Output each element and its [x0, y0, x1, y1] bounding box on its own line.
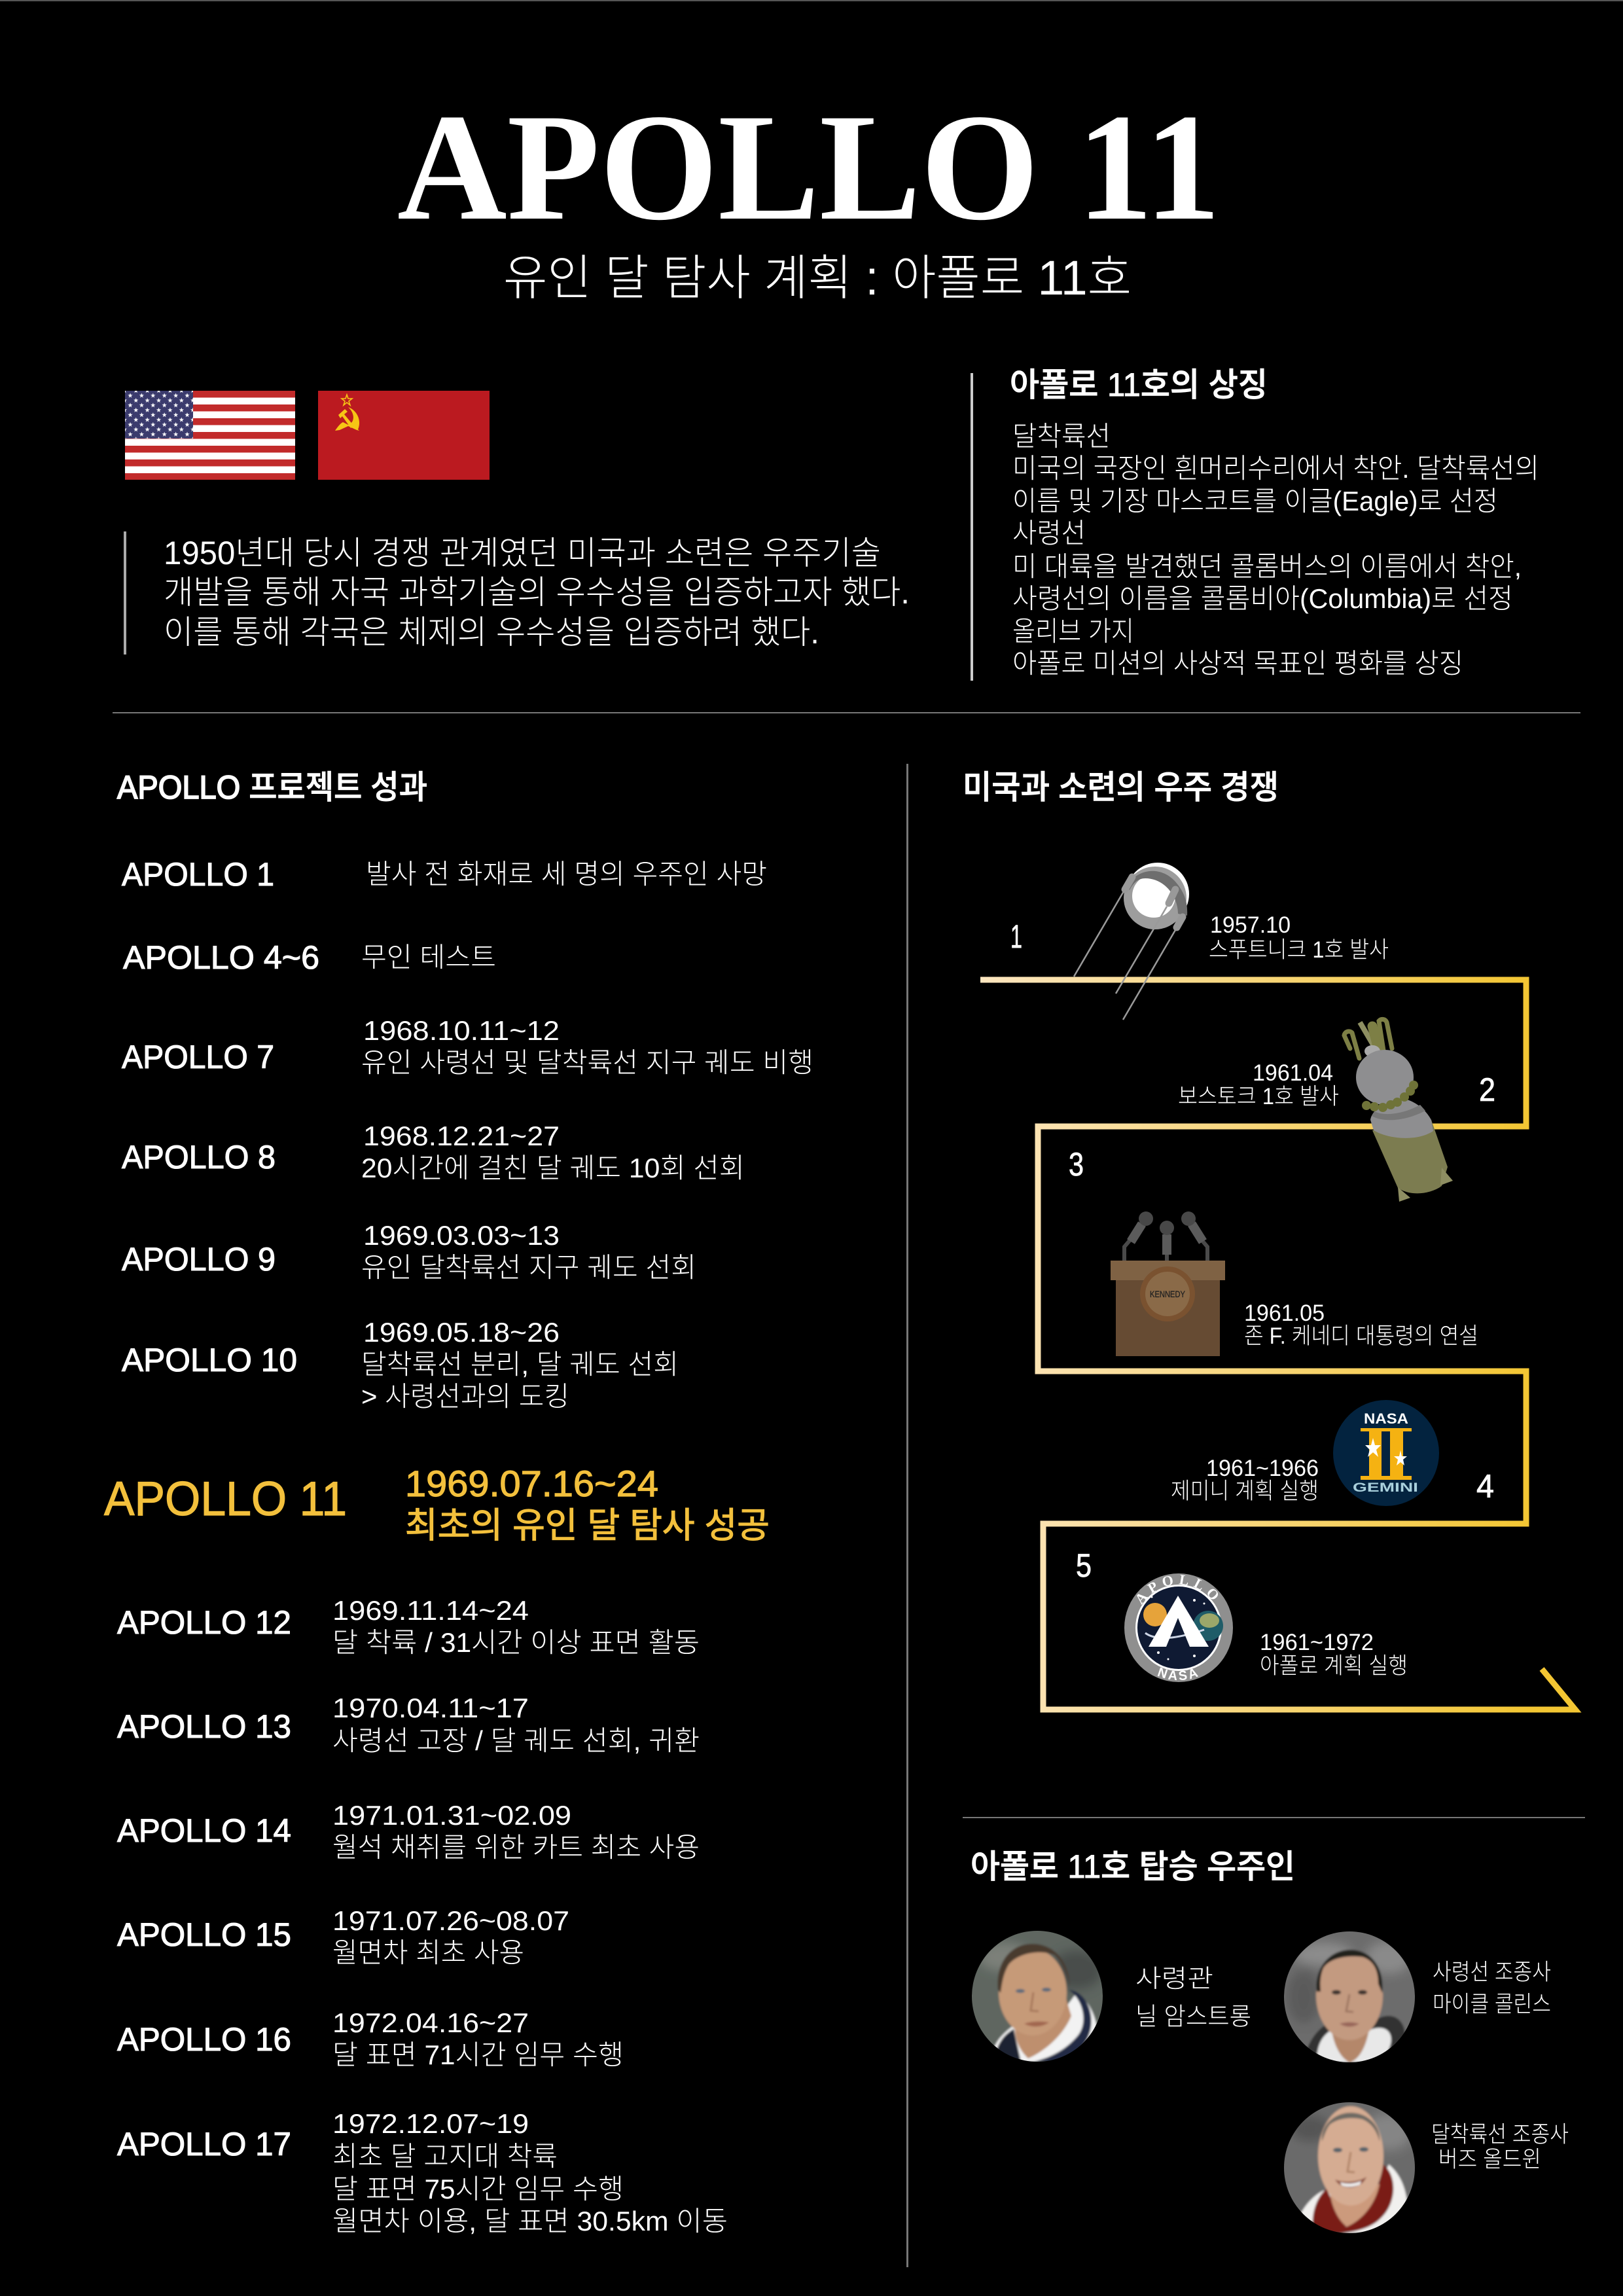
icon: Sputnik	[1074, 863, 1189, 1020]
text block: symbols description: 미 대륙을 발견했던 콜롬버스의 이름에서 착안,	[1012, 551, 1522, 582]
row: Apollo 9: APOLLO 9	[122, 1241, 276, 1278]
text block: symbols description: 사령선	[1012, 518, 1086, 548]
icon: Gemini patch: GEMINI	[1353, 1481, 1418, 1495]
row: Apollo 14	[117, 1800, 700, 1863]
icon: Apollo patch: APOLLO	[1137, 1575, 1218, 1605]
label: step 2: 1961.04	[1253, 1060, 1333, 1086]
label: step 2: 보스토크 1호 발사	[1178, 1084, 1339, 1109]
row: Apollo 12: 1969.11.14~24	[332, 1595, 529, 1626]
label: step 2	[1178, 1060, 1495, 1109]
row: Apollo 10: 달착륙선 분리, 달 궤도 선회	[361, 1349, 679, 1380]
row: Apollo 15: APOLLO 15	[117, 1916, 291, 1953]
row: Apollo 17: 1972.12.07~19	[332, 2108, 529, 2139]
label: step 3: 1961.05	[1244, 1300, 1325, 1326]
text block: symbols description: 미국의 국장인 흰머리수리에서 착안. 달착륙선의	[1012, 453, 1539, 484]
row: Apollo 7	[122, 1015, 813, 1078]
label: step 5: 1961~1972	[1260, 1630, 1374, 1655]
label: step 2: 2	[1479, 1071, 1495, 1108]
row: Apollo 4-6: APOLLO 4~6	[123, 939, 319, 976]
row: Apollo 1: 발사 전 화재로 세 명의 우주인 사망	[366, 859, 767, 889]
label: commander	[1135, 1965, 1251, 2031]
row: Apollo 17: 달 표면 75시간 임무 수행	[332, 2174, 624, 2204]
label: step 4: 1961~1966	[1206, 1456, 1319, 1481]
panel: Apollo project results	[104, 769, 813, 2236]
heading: space race: 미국과 소련의 우주 경쟁	[963, 769, 1279, 806]
portrait: Neil Armstrong	[969, 1928, 1106, 2065]
row: Apollo 12	[117, 1595, 700, 1658]
title: APOLLO 11	[397, 82, 1221, 252]
subtitle: 유인 달 탐사 계획 : 아폴로 11호	[503, 251, 1132, 305]
heading: symbols: 아폴로 11호의 상징	[1010, 367, 1268, 403]
row: Apollo 10: APOLLO 10	[122, 1342, 297, 1378]
row: Apollo 16: 1972.04.16~27	[332, 2007, 529, 2038]
text block: symbols description: 올리브 가지	[1012, 616, 1134, 647]
row: Apollo 15: 1971.07.26~08.07	[332, 1905, 569, 1936]
label: step 4: 4	[1476, 1468, 1494, 1505]
icon: Apollo patch: NASA	[1157, 1668, 1198, 1681]
label: commander: 닐 암스트롱	[1135, 2003, 1251, 2031]
icon: Soviet flag	[318, 391, 490, 480]
row: Apollo 11 highlight: 1969.07.16~24	[405, 1463, 658, 1504]
panel: symbols of Apollo 11	[971, 367, 1539, 681]
panel: US-USSR space race timeline	[963, 769, 1581, 1712]
label: commander: 사령관	[1135, 1965, 1213, 1993]
label: command module pilot: 사령선 조종사	[1433, 1960, 1551, 1985]
label: lunar module pilot	[1431, 2122, 1569, 2172]
heading: project results: APOLLO 프로젝트 성과	[117, 769, 427, 806]
portrait: Buzz Aldrin	[1281, 2099, 1418, 2236]
row: Apollo 4-6	[123, 939, 496, 976]
row: Apollo 14: APOLLO 14	[117, 1812, 291, 1849]
row: Apollo 16: 달 표면 71시간 임무 수행	[332, 2039, 624, 2070]
icon: Gemini patch: NASA	[1364, 1410, 1408, 1427]
row: Apollo 7: 유인 사령선 및 달착륙선 지구 궤도 비행	[361, 1047, 813, 1078]
row: Apollo 17: 최초 달 고지대 착륙	[332, 2141, 558, 2172]
icon: Kennedy podium: KENNEDY	[1150, 1289, 1186, 1299]
row: Apollo 13	[117, 1693, 700, 1756]
row: Apollo 13: 사령선 고장 / 달 궤도 선회, 귀환	[332, 1725, 700, 1756]
label: step 3: 3	[1069, 1146, 1084, 1183]
row: Apollo 10: 1969.05.18~26	[363, 1317, 560, 1348]
row: Apollo 8: 1968.12.21~27	[363, 1121, 560, 1151]
row: Apollo 1: APOLLO 1	[122, 856, 274, 893]
row: Apollo 17: APOLLO 17	[117, 2126, 291, 2162]
icon: Kennedy podium	[1111, 1211, 1225, 1356]
icon: Gemini patch	[1333, 1400, 1439, 1506]
row: Apollo 8: APOLLO 8	[122, 1139, 276, 1175]
text block: symbols description: 이름 및 기장 마스코트를 이글(Eagle)로 선정	[1012, 486, 1498, 516]
row: Apollo 9	[122, 1220, 696, 1283]
row: Apollo 11 highlight: 최초의 유인 달 탐사 성공	[405, 1506, 770, 1545]
row: Apollo 9: 유인 달착륙선 지구 궤도 선회	[361, 1252, 696, 1283]
icon: US flag	[125, 391, 295, 480]
row: Apollo 12: APOLLO 12	[117, 1604, 291, 1641]
row: Apollo 10	[122, 1317, 679, 1412]
row: Apollo 17	[117, 2108, 728, 2236]
icon: Vostok rocket	[1344, 1019, 1453, 1202]
arrow: timeline path	[980, 980, 1575, 1710]
text block: symbols description: 달착륙선	[1012, 421, 1111, 452]
heading: crew: 아폴로 11호 탑승 우주인	[971, 1848, 1295, 1885]
text block: symbols description: 사령선의 이름을 콜롬비아(Columbia)로 선정	[1012, 583, 1513, 614]
row: Apollo 10: > 사령선과의 도킹	[361, 1381, 569, 1412]
row: Apollo 1	[122, 856, 767, 893]
label: command module pilot: 마이클 콜린스	[1433, 1992, 1551, 2017]
icon: rocket antennae	[1344, 1019, 1392, 1060]
label: step 1: 1957.10	[1210, 912, 1291, 938]
row: Apollo 11 highlight	[104, 1463, 770, 1545]
row: Apollo 4-6: 무인 테스트	[361, 942, 496, 973]
row: Apollo 13: APOLLO 13	[117, 1708, 291, 1745]
row: Apollo 16	[117, 2007, 624, 2070]
text block: intro paragraph: 개발을 통해 자국 과학기술의 우수성을 입증하고자 했다.	[164, 574, 910, 611]
label: step 1: 1	[1010, 918, 1022, 955]
panel: Apollo 11 crew	[969, 1848, 1569, 2236]
label: step 3: 존 F. 케네디 대통령의 연설	[1244, 1323, 1478, 1349]
row: Apollo 9: 1969.03.03~13	[363, 1220, 560, 1251]
label: step 4	[1171, 1456, 1494, 1505]
text block: intro paragraph: 1950년대 당시 경쟁 관계였던 미국과 소련은 우주기술	[164, 535, 881, 571]
label: command module pilot	[1433, 1960, 1551, 2017]
portrait: Michael Collins	[1281, 1928, 1418, 2066]
label: step 1	[1010, 912, 1389, 963]
top edge line	[0, 0, 1623, 1]
icon: Apollo patch	[1124, 1573, 1233, 1682]
label: lunar module pilot: 버즈 올드윈	[1438, 2147, 1541, 2172]
label: step 5	[1076, 1547, 1408, 1679]
row: Apollo 13: 1970.04.11~17	[332, 1693, 529, 1723]
label: step 1: 스푸트니크 1호 발사	[1209, 937, 1389, 963]
label: step 5: 아폴로 계획 실행	[1260, 1653, 1408, 1679]
label: step 4: 제미니 계획 실행	[1171, 1479, 1319, 1504]
row: Apollo 8: 20시간에 걸친 달 궤도 10회 선회	[361, 1153, 745, 1183]
row: Apollo 16: APOLLO 16	[117, 2021, 291, 2058]
row: Apollo 11 highlight: APOLLO 11	[104, 1473, 347, 1526]
text block: symbols description: 아폴로 미션의 사상적 목표인 평화를 상징	[1012, 648, 1463, 679]
row: Apollo 15	[117, 1905, 569, 1968]
row: Apollo 7: 1968.10.11~12	[363, 1015, 560, 1046]
text block: intro paragraph	[124, 531, 910, 655]
label: step 3	[1069, 1146, 1478, 1349]
row: Apollo 12: 달 착륙 / 31시간 이상 표면 활동	[332, 1627, 700, 1658]
row: Apollo 7: APOLLO 7	[122, 1039, 274, 1075]
text block: intro paragraph: 이를 통해 각국은 체제의 우수성을 입증하려 했다.	[164, 614, 819, 651]
text block: symbols description	[1012, 421, 1539, 679]
row: Apollo 17: 월면차 이용, 달 표면 30.5km 이동	[332, 2206, 728, 2236]
row: Apollo 15: 월면차 최초 사용	[332, 1937, 524, 1968]
row: Apollo 14: 1971.01.31~02.09	[332, 1800, 571, 1831]
label: step 5: 5	[1076, 1547, 1092, 1584]
row: Apollo 8	[122, 1121, 745, 1183]
row: Apollo 14: 월석 채취를 위한 카트 최초 사용	[332, 1832, 700, 1863]
label: lunar module pilot: 달착륙선 조종사	[1431, 2122, 1569, 2147]
